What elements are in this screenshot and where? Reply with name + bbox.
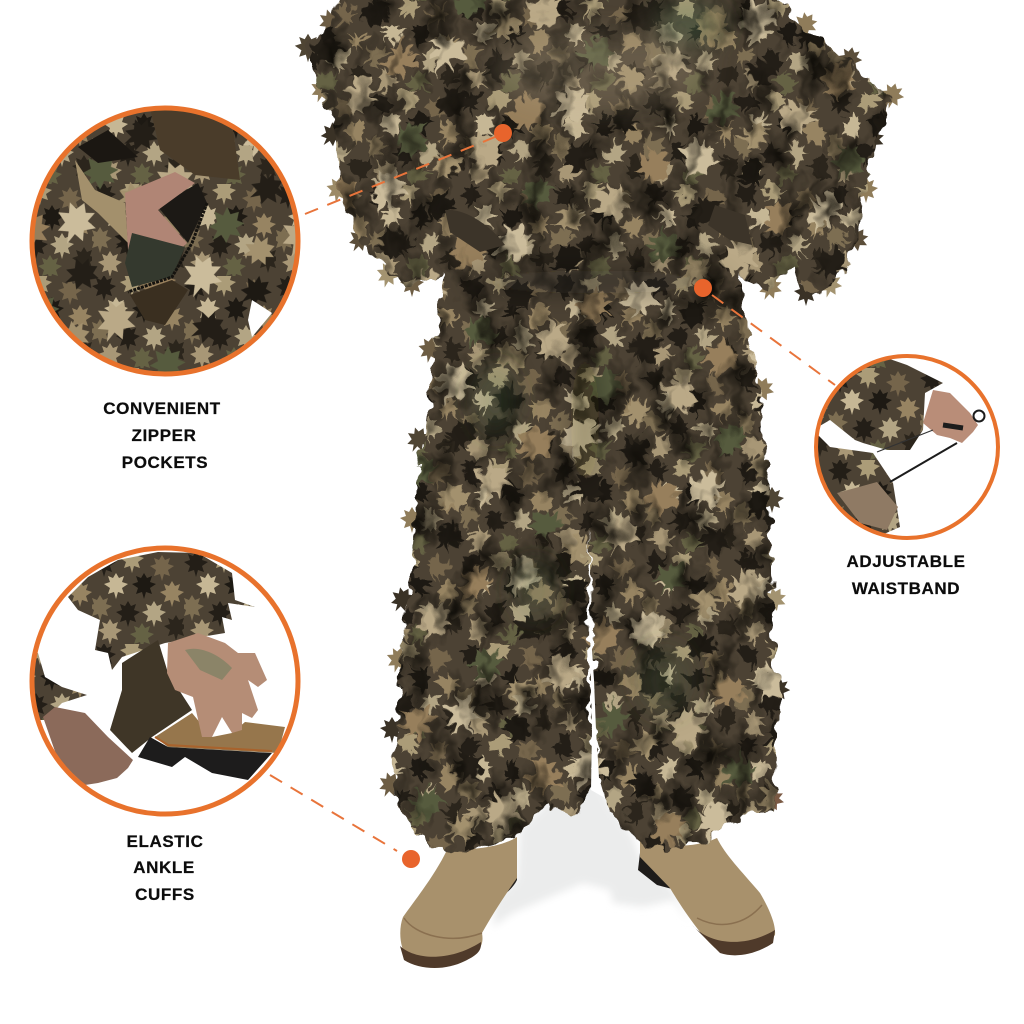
callout line: pockets: [305, 137, 495, 214]
label: adjustable waistband: [846, 552, 966, 598]
callout line: waistband: [712, 295, 835, 385]
callout dot: pockets: [494, 124, 512, 142]
label: elastic ankle cuffs: [127, 832, 203, 904]
detail circle: zipper pockets: [30, 106, 300, 376]
label: elastic ankle cuffs: ANKLE: [133, 858, 195, 877]
ground shadow: [493, 777, 690, 927]
suit: camouflage jacket and trousers: [295, 0, 907, 850]
detail circle: adjustable waistband: [810, 355, 1000, 540]
callout dot: waistband: [694, 279, 712, 297]
label: adjustable waistband: WAISTBAND: [852, 579, 960, 598]
detail circle: elastic ankle cuffs: [28, 546, 300, 816]
gap between trouser legs: [590, 620, 605, 798]
callout line: cuffs: [270, 775, 397, 851]
left boot: [400, 837, 517, 968]
label: elastic ankle cuffs: CUFFS: [135, 885, 195, 904]
label: convenient zipper pockets: CONVENIENT: [103, 399, 221, 418]
right boot: [638, 838, 775, 955]
label: elastic ankle cuffs: ELASTIC: [127, 832, 203, 851]
label: convenient zipper pockets: [103, 399, 221, 472]
callout dot: cuffs: [402, 850, 420, 868]
label: convenient zipper pockets: ZIPPER: [131, 426, 197, 445]
label: convenient zipper pockets: POCKETS: [122, 453, 208, 472]
label: adjustable waistband: ADJUSTABLE: [846, 552, 966, 571]
